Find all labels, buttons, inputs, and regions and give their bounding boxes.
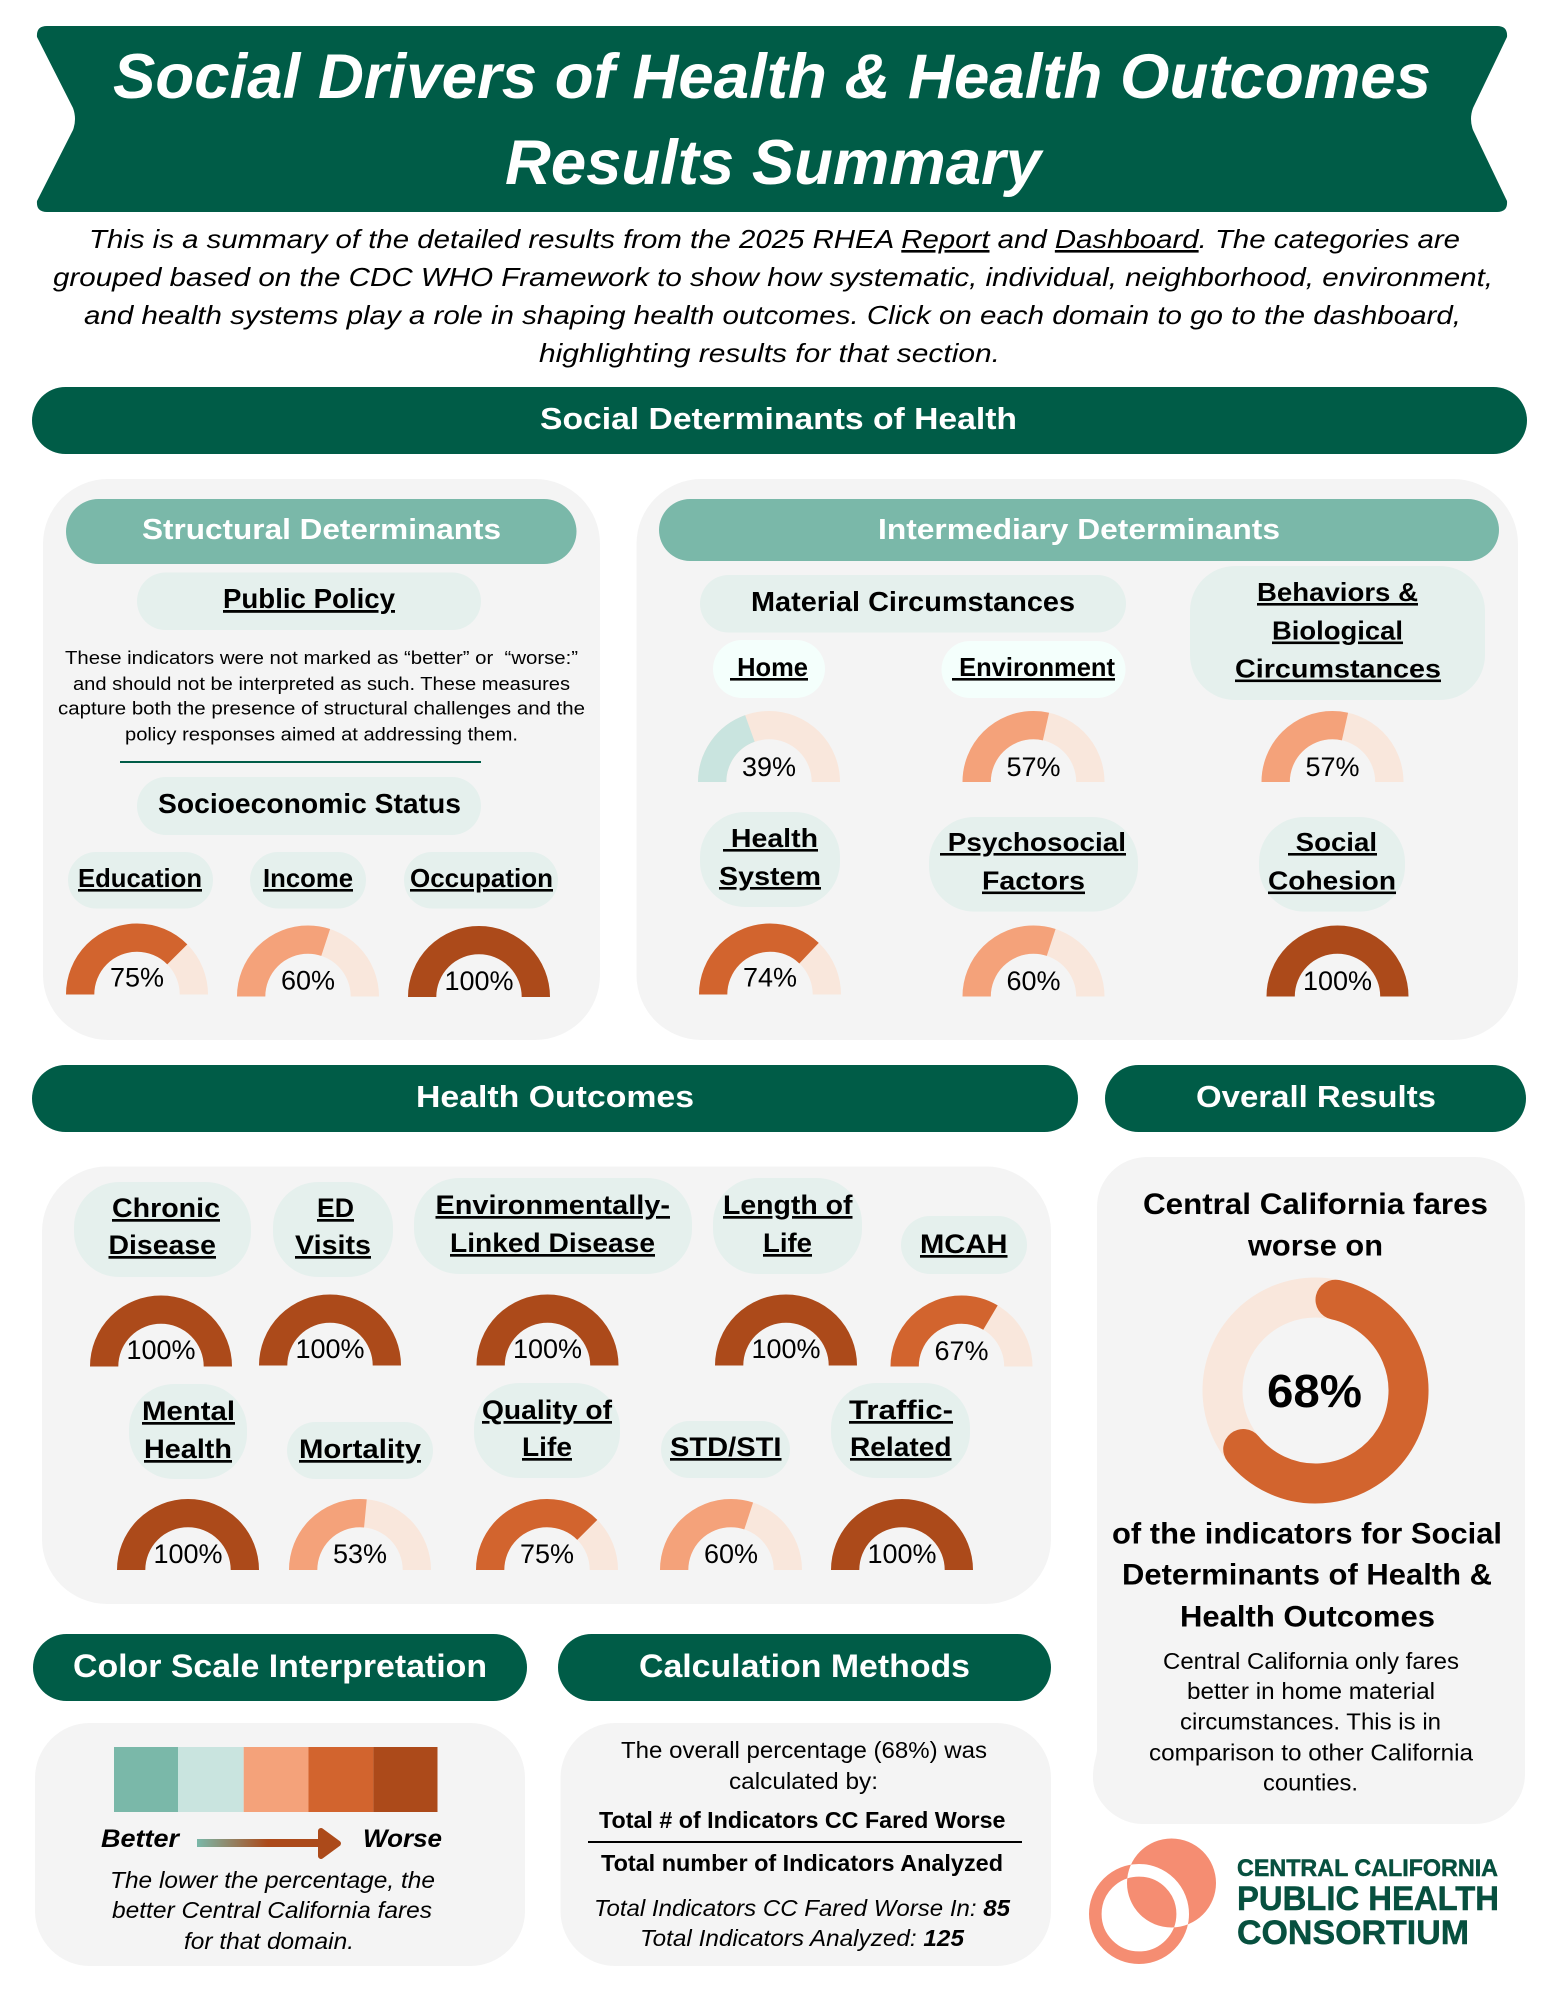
arrow: better to worse [197,1831,338,1856]
heading: intermediary determinants: Intermediary Determinants [878,514,1280,546]
text: public policy note: capture both the presence of structural challenges and the [58,698,585,718]
pill: health system: Health [723,823,818,853]
pill: environmentally-linked disease: Linked Disease [450,1228,655,1258]
section header: Social Determinants of Health: Social Determinants of Health [540,401,1017,436]
panel: calculation methods [560,1723,1051,1966]
pill: socioeconomic status [137,777,481,835]
gauge: MCAH 67% [905,1310,1018,1366]
gauge: mortality 53%: 53% [333,1539,387,1569]
pill: ED visits: Visits [295,1230,371,1260]
pill: material circumstances [700,575,1126,632]
heading: fares worse: worse on [1247,1230,1383,1262]
donut chart: 68%: 68% [1267,1365,1362,1417]
section header: health outcomes: Health Outcomes [416,1079,694,1114]
panel: structural determinants [43,479,600,1040]
formula: Total number of Indicators Analyzed [601,1850,1003,1876]
pill: quality of life: Quality of [482,1395,613,1425]
pill: psychosocial factors [929,817,1138,912]
gauge: health system 74% [713,938,827,994]
gauge: psychosocial 60%: 60% [1006,966,1061,996]
gauge: home 39% [712,725,826,782]
pill: psychosocial factors: Factors [982,866,1085,896]
gauge: income 60%: 60% [281,966,335,996]
pill: education [68,852,213,908]
title banner: Results Summary [505,128,1044,198]
pill: chronic disease: Disease [108,1230,216,1260]
pill: ED visits: ED [317,1193,354,1223]
gauge: traffic-related 100%: 100% [867,1539,937,1569]
gauge: chronic disease 100%: 100% [126,1335,196,1365]
pill: behaviors and biological circumstances: Circumstances [1235,654,1441,684]
pill: STD/STI: STD/STI [670,1432,782,1462]
title banner: Social Drivers of Health & Health Outcomes [113,42,1431,112]
text: calculation intro: The overall percentage (68%) was [621,1737,987,1763]
section header: calculation methods: Calculation Methods [639,1648,970,1684]
intro text: This is a summary of the detailed results from the 2025 RHEA Report and Dashboard . The categories are [89,224,1460,254]
gauge: mental health 100% [131,1513,245,1570]
heading: fares worse [1143,1188,1488,1262]
heading: intermediary determinants [659,499,1499,561]
pill: public policy [137,572,481,630]
text: of the indicators [1112,1518,1502,1634]
panel: health outcomes [42,1166,1051,1604]
gauge: education 75% [80,938,194,994]
donut chart: 68% [1222,1298,1409,1484]
color swatches [114,1747,438,1812]
pill: quality of life [474,1383,620,1478]
text: overall note: Central California only fares [1163,1648,1459,1674]
pill: mental health: Mental [142,1396,235,1426]
icon: logo circles [1095,1838,1216,1958]
pill: chronic disease [74,1182,251,1277]
gauge: ED visits 100% [273,1309,387,1366]
pill: quality of life: Life [522,1432,572,1462]
logo wordmark: CONSORTIUM [1237,1914,1469,1952]
logo wordmark: CENTRAL CALIFORNIA [1237,1855,1498,1882]
gauge: quality of life 75% [490,1513,604,1570]
pill: MCAH: MCAH [920,1229,1008,1259]
section header: overall results [1105,1065,1526,1132]
pill: home: Home [730,652,808,682]
text: overall note: circumstances. This is in [1180,1708,1441,1734]
gauge: health system 74%: 74% [743,962,797,992]
gauge: length of life 100%: 100% [751,1334,821,1364]
section header: calculation methods [558,1634,1051,1701]
section header: color scale interpretation: Color Scale Interpretation [73,1648,487,1684]
text: scale explanation: The lower the percentage, the [110,1867,435,1893]
text: public policy note: These indicators were not marked as “better” or “worse:” [65,647,578,668]
pill: length of life: Length of [723,1190,854,1220]
text: scale explanation: for that domain. [184,1928,354,1954]
text: overall note: comparison to other California [1149,1740,1473,1766]
text: public policy note [58,647,585,744]
pill: home [713,640,825,698]
gauge: environmentally-linked disease 100% [491,1309,604,1366]
gauge: quality of life 75%: 75% [520,1539,574,1569]
gauge: traffic-related 100% [845,1513,959,1570]
text: overall note: counties. [1263,1770,1358,1796]
section header: Social Determinants of Health [32,387,1527,454]
pill: STD/STI [661,1421,790,1478]
gauge: STD/STI 60%: 60% [704,1539,758,1569]
label: better: Better [101,1825,180,1853]
gauge: environment 57%: 57% [1006,752,1061,782]
pill: income: Income [263,863,353,893]
gauge: psychosocial 60% [977,940,1090,996]
pill: length of life [713,1178,862,1274]
pill: mental health: Health [144,1434,232,1464]
gauge: STD/STI 60% [674,1513,788,1570]
pill: health system [700,812,840,907]
gauge: ED visits 100%: 100% [295,1334,365,1364]
heading: structural determinants [66,499,576,564]
pill: traffic-related: Traffic- [849,1395,953,1425]
gauge: behaviors 57%: 57% [1305,752,1360,782]
panel: color scale [35,1723,525,1966]
pill: mortality: Mortality [299,1434,421,1464]
pill: public policy: Public Policy [223,583,395,614]
text: calculation intro [621,1737,987,1794]
pill: MCAH [901,1216,1027,1274]
pill: mental health [129,1384,247,1479]
pill: social cohesion: Social [1288,827,1377,857]
heading: fares worse: Central California fares [1143,1188,1488,1221]
gauge: chronic disease 100% [104,1310,218,1366]
pill: environmentally-linked disease: Environmentally- [436,1190,670,1220]
pill: social cohesion [1259,817,1405,912]
pill: behaviors and biological circumstances: Biological [1272,616,1403,646]
text: calculation intro: calculated by: [729,1768,878,1794]
label: worse: Worse [363,1825,442,1853]
pill: traffic-related: Related [850,1432,952,1462]
pill: traffic-related [831,1383,970,1478]
pill: material circumstances: Material Circumstances [751,586,1075,617]
pill: education: Education [78,863,202,893]
gauge: mental health 100%: 100% [153,1539,223,1569]
formula: Total # of Indicators CC Fared Worse [599,1807,1006,1833]
gauge: length of life 100% [729,1309,843,1366]
gauge: occupation 100% [422,940,536,997]
section header: health outcomes [32,1065,1078,1132]
text: of the indicators: of the indicators for Social [1112,1518,1502,1550]
formula [588,1807,1022,1876]
pill: social cohesion: Cohesion [1268,866,1396,896]
panel: overall results [1093,1157,1525,1824]
text: public policy note: and should not be interpreted as such. These measures [73,673,570,694]
text: indicator totals [594,1895,1011,1951]
gauge: environment 57% [977,725,1090,782]
gauge: environmentally-linked disease 100%: 100% [513,1334,582,1364]
panel: intermediary determinants [636,479,1518,1040]
pill: occupation [404,852,558,908]
pill: behaviors and biological circumstances: Behaviors & [1257,577,1418,607]
gauge: MCAH 67%: 67% [934,1336,989,1366]
gauge: social cohesion 100%: 100% [1303,966,1372,996]
intro text: grouped based on the CDC WHO Framework to show how systematic, individual, neighborhood, environment, [53,262,1493,292]
heading: structural determinants: Structural Determinants [142,514,501,546]
gauge: social cohesion 100% [1281,940,1394,996]
section header: overall results: Overall Results [1196,1079,1436,1114]
pill: income [250,852,366,908]
pill: psychosocial factors: Psychosocial [940,827,1126,857]
intro text: and health systems play a role in shaping health outcomes. Click on each domain to go to the dashboard, [84,300,1461,330]
section header: color scale interpretation [33,1634,527,1701]
logo wordmark [1237,1855,1499,1952]
text: of the indicators: Health Outcomes [1180,1600,1435,1634]
pill: socioeconomic status: Socioeconomic Status [158,788,461,819]
text: indicator totals: Total Indicators Analyzed: 125 [640,1925,965,1951]
pill: chronic disease: Chronic [112,1193,220,1223]
text: scale explanation [110,1867,435,1954]
text: public policy note: policy responses aimed at addressing them. [125,724,518,744]
gauge: home 39%: 39% [742,752,796,782]
pill: mortality [287,1422,433,1479]
pill: health system: System [719,861,821,891]
pill: environment [942,641,1126,698]
gauge: education 75%: 75% [110,962,164,992]
gauge: mortality 53% [303,1513,417,1570]
text: indicator totals: Total Indicators CC Fared Worse In: 85 [594,1895,1011,1921]
logo: central california public health consortium [1095,1838,1499,1958]
intro text [53,224,1493,368]
logo wordmark: PUBLIC HEALTH [1237,1880,1499,1918]
pill: occupation: Occupation [410,863,553,893]
pill: environment: Environment [952,652,1115,682]
text: scale explanation: better Central California fares [112,1897,432,1923]
text: overall note [1149,1648,1473,1796]
gauge: occupation 100%: 100% [444,966,514,996]
text: of the indicators: Determinants of Health & [1122,1558,1492,1592]
pill: environmentally-linked disease [414,1178,692,1274]
pill: behaviors and biological circumstances [1190,566,1485,700]
gauge: income 60% [251,940,365,996]
pill: ED visits [273,1182,393,1277]
pill: length of life: Life [763,1228,812,1258]
intro text: highlighting results for that section. [539,338,1000,368]
text: overall note: better in home material [1187,1678,1435,1704]
title banner [37,26,1507,212]
gauge: behaviors 57% [1276,725,1389,782]
